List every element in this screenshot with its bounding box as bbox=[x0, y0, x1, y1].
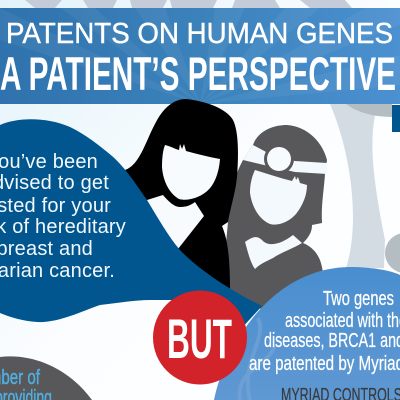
head mirror band bbox=[243, 145, 327, 174]
mirror bbox=[267, 147, 291, 171]
icon: doctor figure bbox=[222, 125, 327, 320]
panel: genes circle bbox=[214, 267, 400, 400]
title line 1: PATENTS ON HUMAN GENES bbox=[6, 18, 393, 50]
chest bbox=[147, 195, 204, 249]
face bbox=[162, 144, 220, 200]
genes text bbox=[249, 288, 400, 375]
panel: advice blob bbox=[0, 119, 262, 330]
icon: DNA strand bbox=[240, 318, 275, 400]
icon: patient figure bbox=[125, 99, 238, 290]
panel: gray circle bbox=[0, 356, 92, 400]
BUT badge bbox=[153, 290, 247, 384]
gray circle text bbox=[0, 367, 52, 400]
BUT badge: BUT bbox=[167, 307, 232, 370]
title banner bbox=[0, 8, 400, 104]
advice text bbox=[0, 151, 126, 282]
chest bbox=[245, 235, 302, 269]
face bbox=[250, 170, 307, 225]
